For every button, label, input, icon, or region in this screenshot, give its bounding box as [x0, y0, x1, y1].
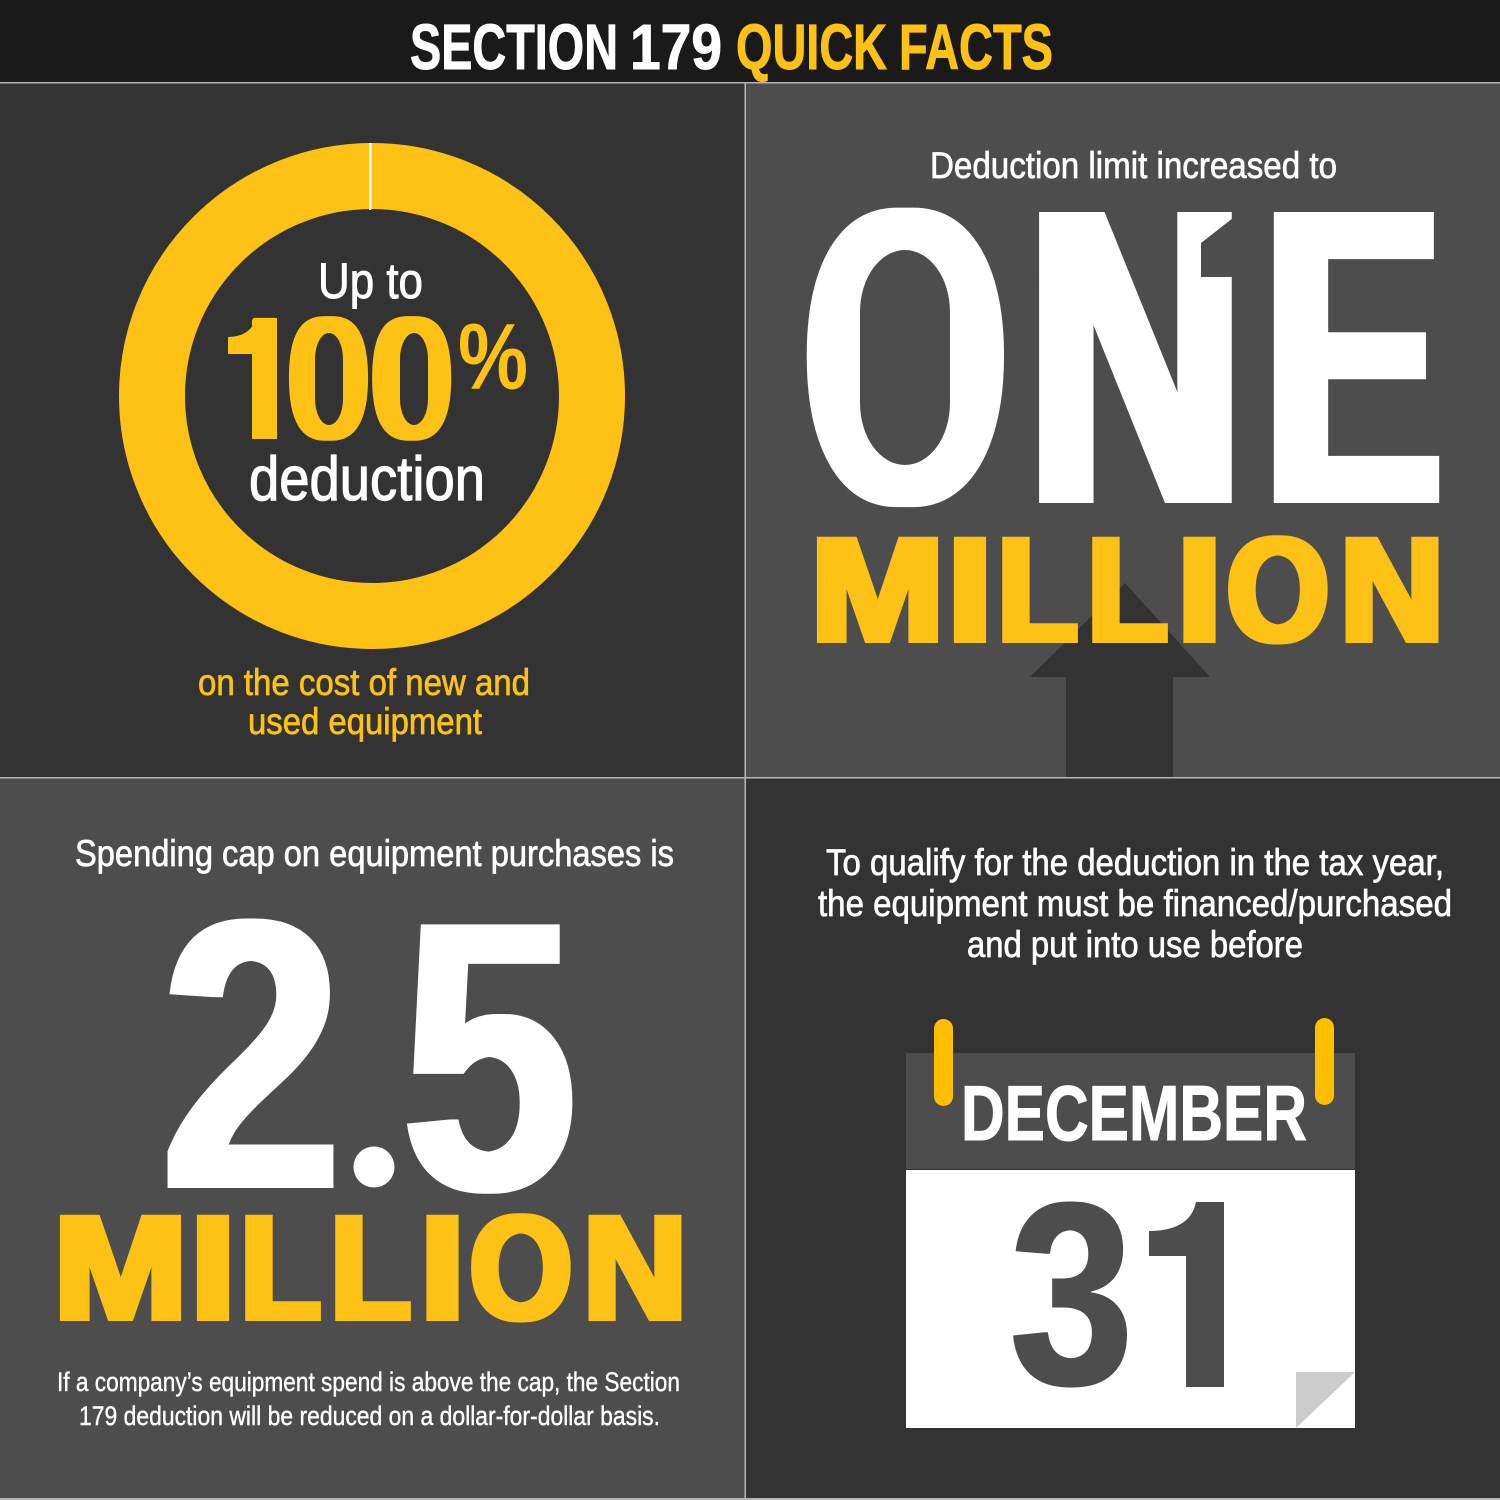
text: on the cost of new and used equipment: used equipment: [248, 701, 483, 742]
text: footnote: If a company’s equipment spend is above the cap, the Section: [57, 1367, 680, 1397]
icon: up arrow: [1030, 583, 1210, 778]
text: 31: 1: [1139, 1148, 1260, 1440]
text: up to: Up to: [318, 253, 423, 309]
text: 2.5: [160, 839, 577, 1272]
text: 2.5: 5: [401, 841, 577, 1272]
text: MILLION: M: [54, 1184, 187, 1352]
text: DECEMBER: DECEMBER: [961, 1069, 1307, 1157]
text: deduction limit: Deduction limit increased to: [930, 145, 1337, 186]
header bar: [0, 0, 1500, 83]
text: 100 percent: 1: [234, 281, 290, 477]
title: 179: [630, 11, 722, 83]
panel: december 31: [745, 778, 1500, 1500]
title: SECTION: [410, 11, 618, 83]
title: QUICK: [736, 11, 887, 83]
text: on the cost of new and used equipment: [198, 662, 530, 742]
text: 2.5: .: [352, 1033, 396, 1212]
text: MILLION: L: [998, 506, 1078, 674]
text: footnote: [57, 1367, 680, 1431]
icon: numeral one notch in N: [1201, 218, 1233, 277]
calendar ring right: [1315, 1018, 1334, 1105]
icon: calendar: [906, 1018, 1355, 1440]
text: 100 percent: 00: [287, 281, 453, 477]
text: MILLION: M: [811, 506, 944, 674]
text: MILLION: I: [191, 1184, 235, 1352]
text: footnote: 179 deduction will be reduced on a dollar-for-dollar basis.: [79, 1401, 660, 1431]
text: MILLION: L: [331, 1184, 411, 1352]
title: FACTS: [899, 11, 1053, 83]
text: 100 percent: %: [458, 304, 528, 409]
donut chart: [152, 143, 592, 616]
text: MILLION: I: [420, 1184, 465, 1352]
text: qualify: and put into use before: [967, 924, 1303, 965]
text: MILLION: I: [1177, 506, 1222, 674]
text: 2.5: 2: [160, 839, 343, 1270]
text: MILLION: O: [470, 1184, 572, 1352]
text: 100 percent: [222, 281, 528, 477]
text: deduction: deduction: [249, 445, 485, 514]
panel: 2.5 million: [0, 778, 745, 1500]
panel: one million: [745, 83, 1500, 778]
text: qualify: To qualify for the deduction in the tax year,: [826, 842, 1444, 883]
text: MILLION: L: [241, 1184, 321, 1352]
text: ONE: [804, 120, 1442, 593]
text: MILLION: N: [583, 1184, 687, 1352]
text: on the cost of new and used equipment: on the cost of new and: [198, 662, 530, 703]
text: ONE: O: [804, 120, 1007, 593]
text: spending cap: Spending cap on equipment purchases is: [75, 833, 674, 874]
text: 31: [1010, 1148, 1264, 1440]
text: ONE: N: [1027, 120, 1244, 593]
text: MILLION: O: [1227, 506, 1329, 674]
text: MILLION: L: [1088, 506, 1168, 674]
calendar ring left: [934, 1019, 953, 1106]
panel: 100% deduction: [0, 83, 745, 778]
page curl: [1296, 1372, 1355, 1428]
text: 31: 3: [1010, 1148, 1133, 1440]
text: qualify: [818, 842, 1452, 965]
text: MILLION: N: [1340, 506, 1444, 674]
text: MILLION: I: [948, 506, 992, 674]
